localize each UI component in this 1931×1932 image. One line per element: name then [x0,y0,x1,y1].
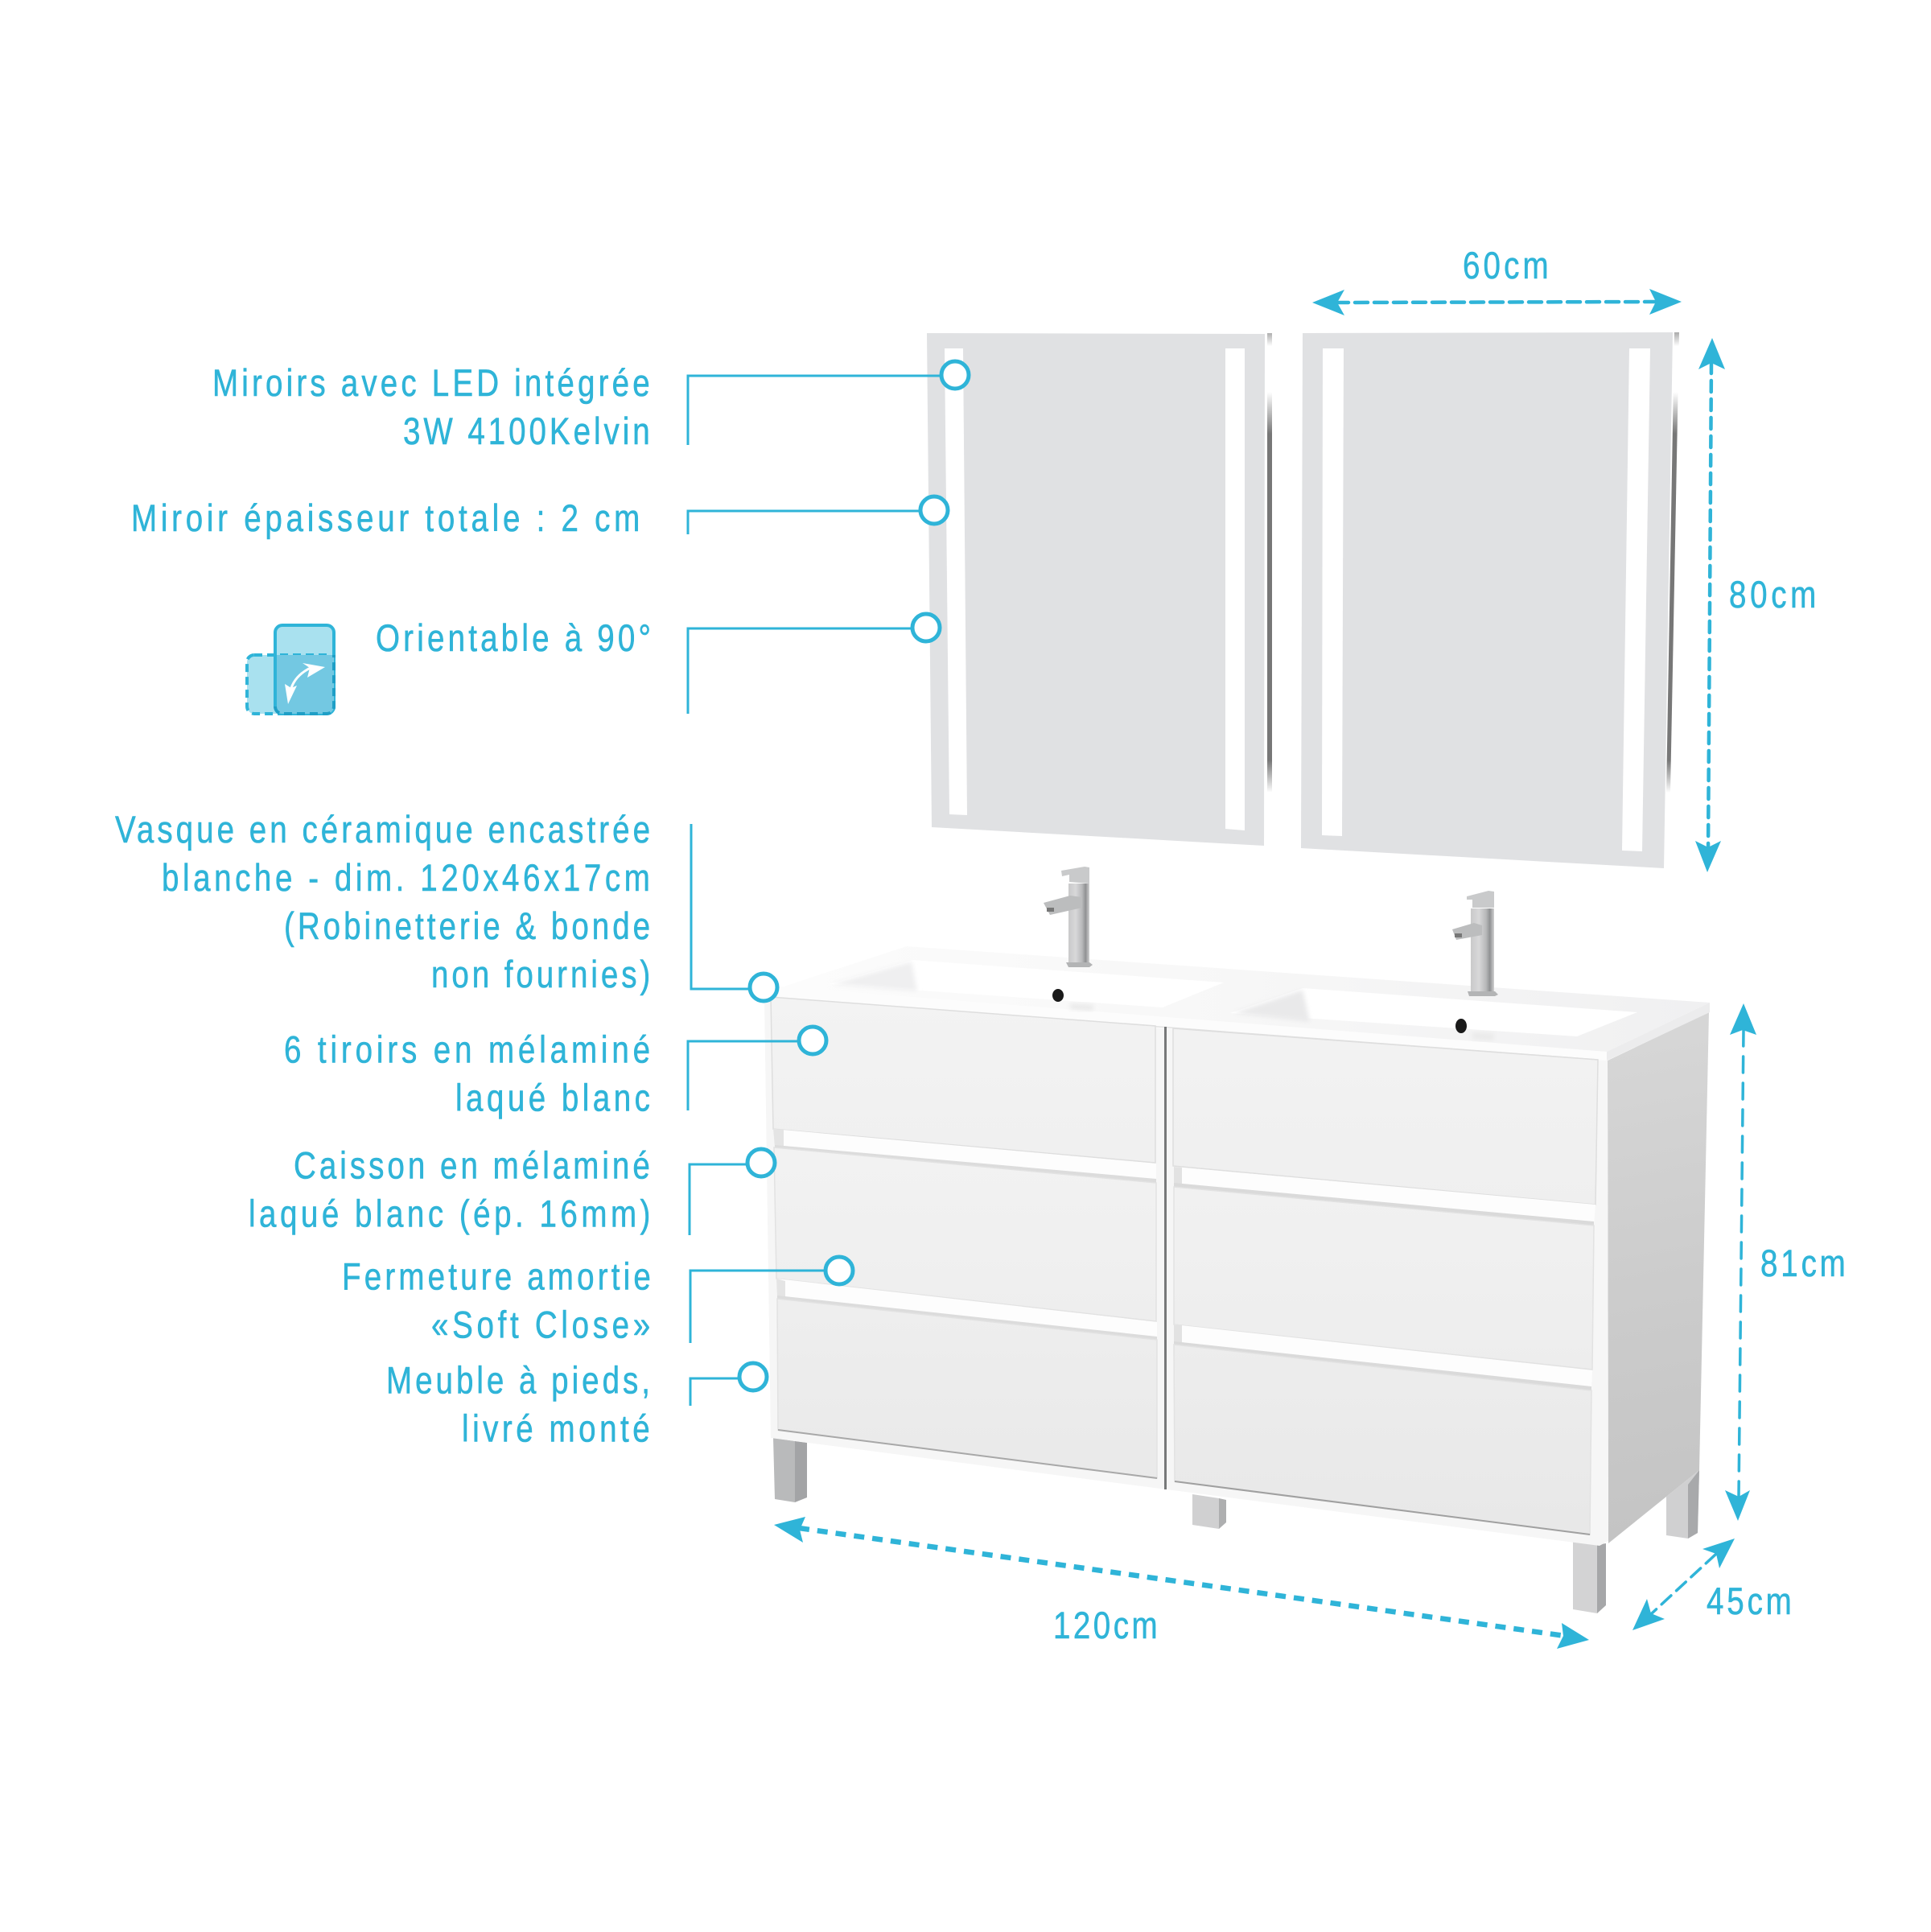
cabinet with basin [764,946,1710,1613]
arrow: cabinet height 81cm [1725,1003,1756,1521]
left grip 2 [776,1279,1157,1341]
left mirror edge [1267,333,1272,792]
text: ceramic basin: Vasque en céramique encastrée [115,809,650,851]
text: drawers [284,1029,650,1119]
left basin bowl [829,960,1224,1011]
text: LED mirrors: 3W 4100Kelvin [403,410,650,453]
text: LED mirrors [212,362,650,453]
text: ceramic basin: (Robinetterie & bonde [284,905,650,948]
text: ceramic basin: non fournies) [431,954,650,996]
leader: orientable [688,614,940,714]
right grip 1 [1174,1167,1595,1226]
left grip 1 [773,1129,1156,1183]
right faucet [1452,891,1498,996]
text: legs [386,1360,650,1450]
cabinet front frame [764,999,1608,1546]
left mirror [927,333,1272,846]
right drawer 3 [1174,1345,1591,1534]
icon: orientable mirror rotating 90 degrees [247,625,334,714]
arrow: mirror height 80cm [1695,338,1725,872]
arrow: mirror width 60cm [1312,289,1682,315]
leader: mirror thickness [688,496,948,534]
leader: LED mirrors [688,361,969,445]
text: legs: livré monté [462,1408,650,1450]
right grip 2 [1174,1324,1592,1391]
dimension: 60cm: 60cm [1463,245,1549,287]
right drawer 1 [1173,1028,1598,1205]
right mirror edge [1666,332,1679,793]
right basin bowl [1230,988,1637,1040]
right mirror LED strip, right [1622,348,1650,851]
text: mirror thickness: Miroir épaisseur totale : 2 cm [131,497,640,540]
text: soft close [342,1256,651,1346]
left drawer 2 [774,1147,1156,1321]
leader: drawers [688,1027,826,1110]
arrow: cabinet depth 45cm [1632,1539,1735,1630]
left column divider [1164,1027,1167,1489]
text: soft close: «Soft Close» [431,1304,650,1346]
right side panel [1608,1012,1709,1543]
text: LED mirrors: Miroirs avec LED intégrée [212,362,650,405]
leader: legs [690,1363,767,1406]
basin top slab [768,946,1710,1061]
front left leg [773,1438,807,1502]
right drawer 2 [1174,1187,1594,1370]
leader: ceramic basin [691,824,777,1001]
text: orientable: Orientable à 90° [376,617,651,660]
dimension: 45cm: 45cm [1707,1580,1792,1623]
text: soft close: Fermeture amortie [342,1256,651,1298]
left mirror LED strip, left [945,348,967,815]
front right leg [1573,1541,1606,1613]
leader: carcass [690,1149,775,1235]
dimension: 120cm: 120cm [1053,1605,1158,1647]
left mirror LED strip, right [1225,348,1245,830]
text: ceramic basin: blanche - dim. 120x46x17cm [162,857,650,900]
dimension: 80cm: 80cm [1729,574,1816,616]
left drawer 1 [771,997,1155,1163]
right mirror LED strip, left [1322,348,1344,836]
middle leg [1192,1494,1226,1529]
text: ceramic basin [115,809,650,996]
dimension: 81cm: 81cm [1760,1242,1846,1285]
text: drawers: 6 tiroirs en mélaminé [284,1029,650,1071]
text: legs: Meuble à pieds, [386,1360,650,1402]
leader: soft close [690,1257,853,1343]
back right leg [1666,1470,1699,1539]
text: carcass: Caisson en mélaminé [294,1145,650,1187]
left faucet [1044,867,1093,967]
right mirror [1301,332,1679,868]
right drain [1455,1019,1467,1033]
text: drawers: laqué blanc [455,1077,650,1119]
left drain [1052,989,1064,1002]
text: carcass: laqué blanc (ép. 16mm) [249,1193,650,1235]
arrow: cabinet width 120cm [774,1517,1589,1649]
left drawer 3 [777,1299,1157,1478]
text: carcass [249,1145,650,1235]
